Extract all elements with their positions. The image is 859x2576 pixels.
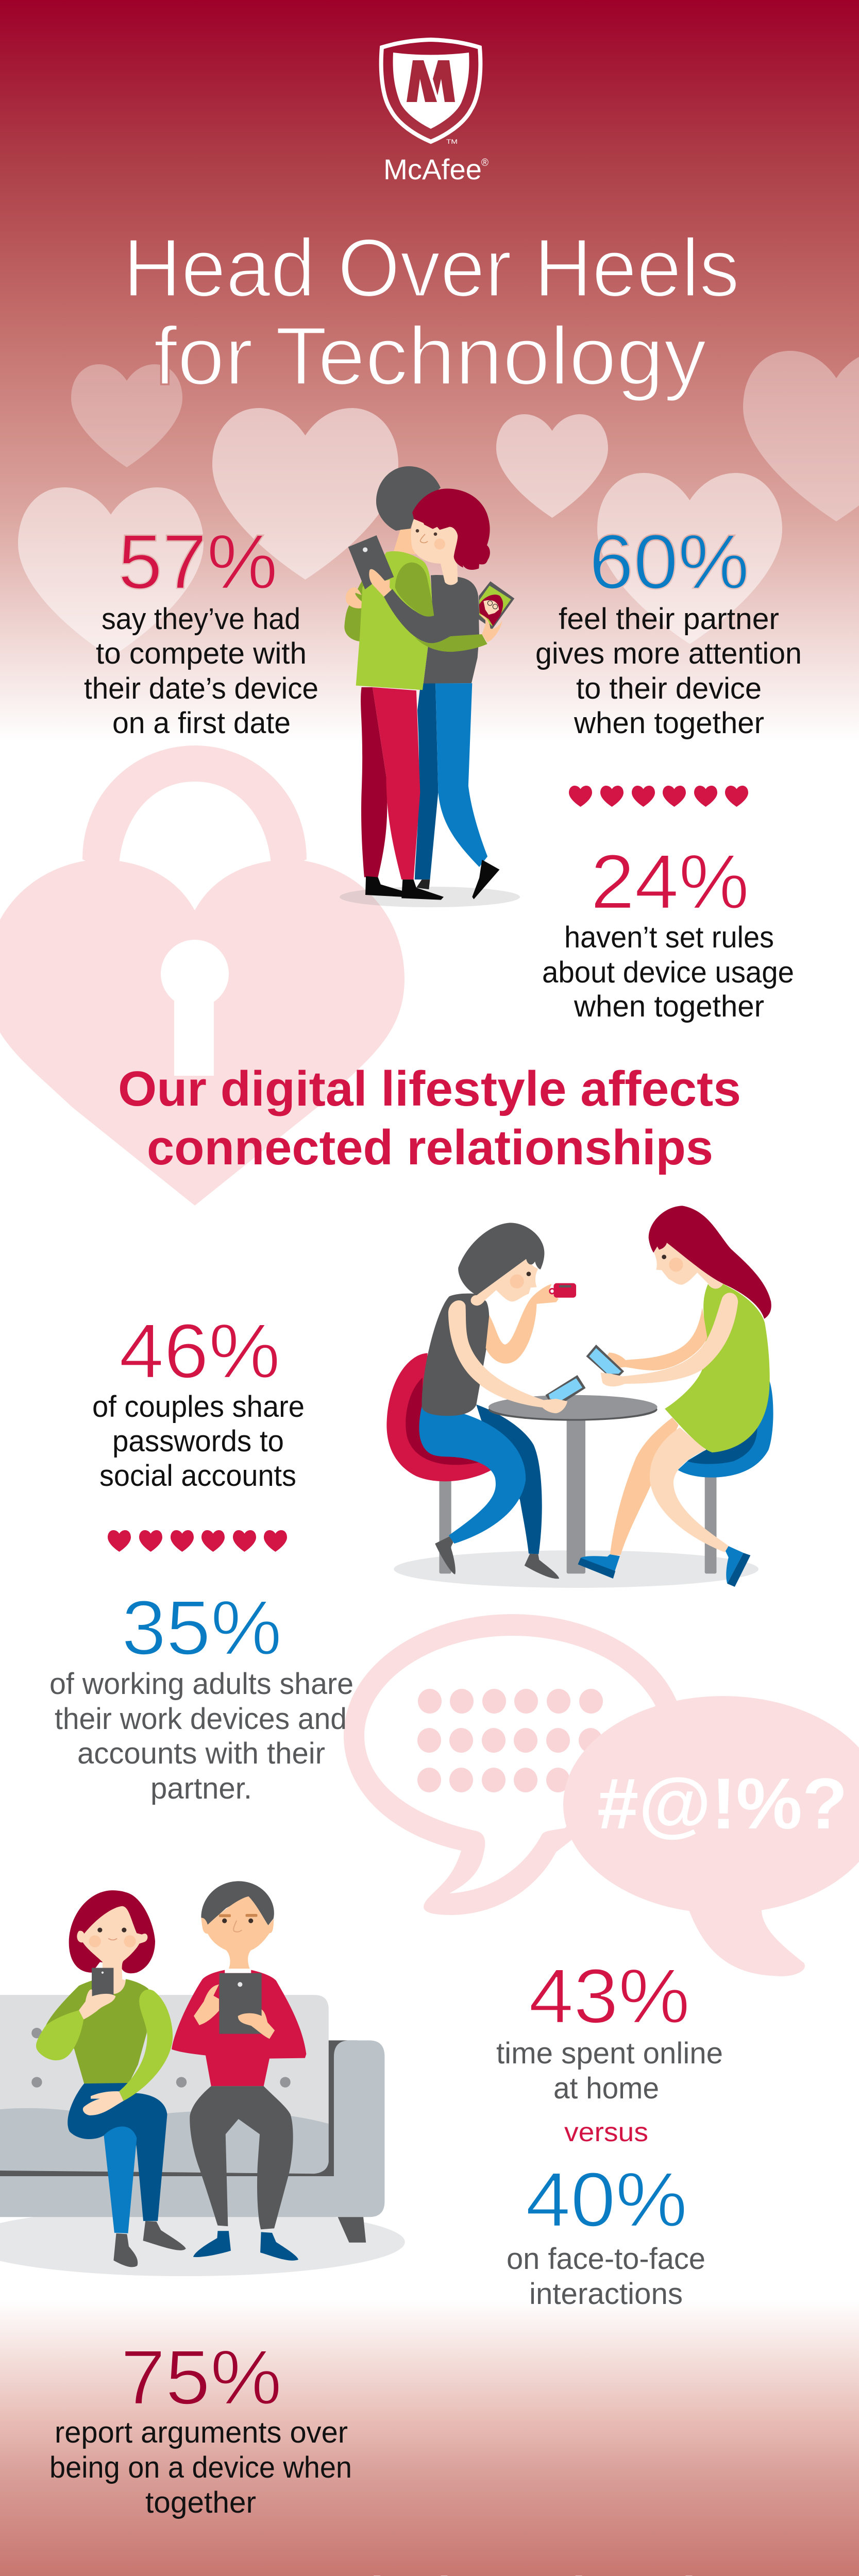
stat: 40% <box>507 2156 705 2311</box>
stat: 60%: 60% <box>589 518 749 605</box>
label: versus: versus <box>564 2117 648 2147</box>
stat: 60%: when together <box>574 706 764 740</box>
stat: 40%: interactions <box>529 2277 683 2311</box>
stat: 75%: report arguments over <box>55 2416 348 2449</box>
stat: 57%: 57% <box>118 518 278 605</box>
stat: 35%: partner. <box>150 1772 252 1805</box>
icon: row of hearts <box>108 1530 287 1552</box>
stat: 57%: to compete with <box>96 637 307 670</box>
stat: 43%: 43% <box>529 1953 690 2039</box>
stat: 75%: being on a device when <box>49 2451 352 2484</box>
stat: 60% <box>535 518 802 740</box>
icon: speech bubbles: #@!%? <box>597 1763 848 1844</box>
illustration: couple on a sofa <box>0 1881 405 2276</box>
stat: 43%: time spent online <box>496 2037 723 2070</box>
stat: 35% <box>49 1584 353 1805</box>
heading: digital lifestyle <box>118 1061 741 1175</box>
background: bottom gradient <box>0 2299 859 2576</box>
logo: McAfee shield <box>381 40 480 145</box>
stat: 60%: gives more attention <box>535 637 802 670</box>
icon: row of hearts <box>569 786 748 807</box>
heading: digital lifestyle: connected relationships <box>147 1120 713 1175</box>
icon: speech bubbles <box>344 1614 859 1976</box>
logo wordmark: McAfee <box>383 153 482 185</box>
background hearts <box>18 351 859 657</box>
stat: 60%: to their device <box>576 672 762 705</box>
stat: 60%: feel their partner <box>559 602 779 636</box>
icon: padlock heart <box>0 745 405 1206</box>
logo wordmark: ® <box>481 157 489 168</box>
stat: 46%: of couples share <box>92 1390 305 1423</box>
logo: McAfee shield: TM <box>446 138 458 145</box>
stat: 75% <box>49 2334 352 2519</box>
title <box>123 222 739 402</box>
upper bodies <box>344 466 514 690</box>
stat: 43%: at home <box>553 2072 659 2105</box>
stat: 75%: together <box>145 2486 256 2519</box>
stat: 40%: 40% <box>526 2156 687 2243</box>
stat: 35%: of working adults share <box>49 1667 353 1701</box>
stat: 46%: passwords to <box>112 1425 284 1458</box>
legs <box>361 683 499 900</box>
stat: 35%: accounts with their <box>77 1737 325 1770</box>
stat: 24%: 24% <box>591 838 749 925</box>
stat: 57%: on a first date <box>112 706 291 740</box>
stat: 40%: on face-to-face <box>507 2242 705 2276</box>
stat: 35%: their work devices and <box>55 1702 347 1736</box>
shadow <box>340 887 520 907</box>
stat: 46% <box>92 1308 305 1493</box>
title: Head Over Heels <box>123 222 739 314</box>
stat: 43% <box>496 1953 723 2105</box>
stat: 75%: 75% <box>121 2334 282 2420</box>
illustration: hugging couple with devices <box>340 466 520 907</box>
stat: 57%: their date’s device <box>84 672 318 705</box>
stat: 24%: when together <box>574 990 764 1023</box>
heading: digital lifestyle: Our digital lifestyle affects <box>118 1061 741 1116</box>
stat: 24%: about device usage <box>542 956 794 989</box>
stat: 46%: social accounts <box>99 1459 296 1493</box>
stat: 57% <box>84 518 318 740</box>
stat: 24% <box>542 838 794 1023</box>
stat: 24%: haven’t set rules <box>564 921 774 954</box>
illustration: couple at a cafe table <box>386 1206 773 1588</box>
stat: 46%: 46% <box>119 1308 280 1394</box>
stat: 35%: 35% <box>122 1584 282 1671</box>
stat: 57%: say they’ve had <box>102 602 300 636</box>
title: for Technology <box>154 310 706 402</box>
background: top gradient <box>0 0 859 742</box>
